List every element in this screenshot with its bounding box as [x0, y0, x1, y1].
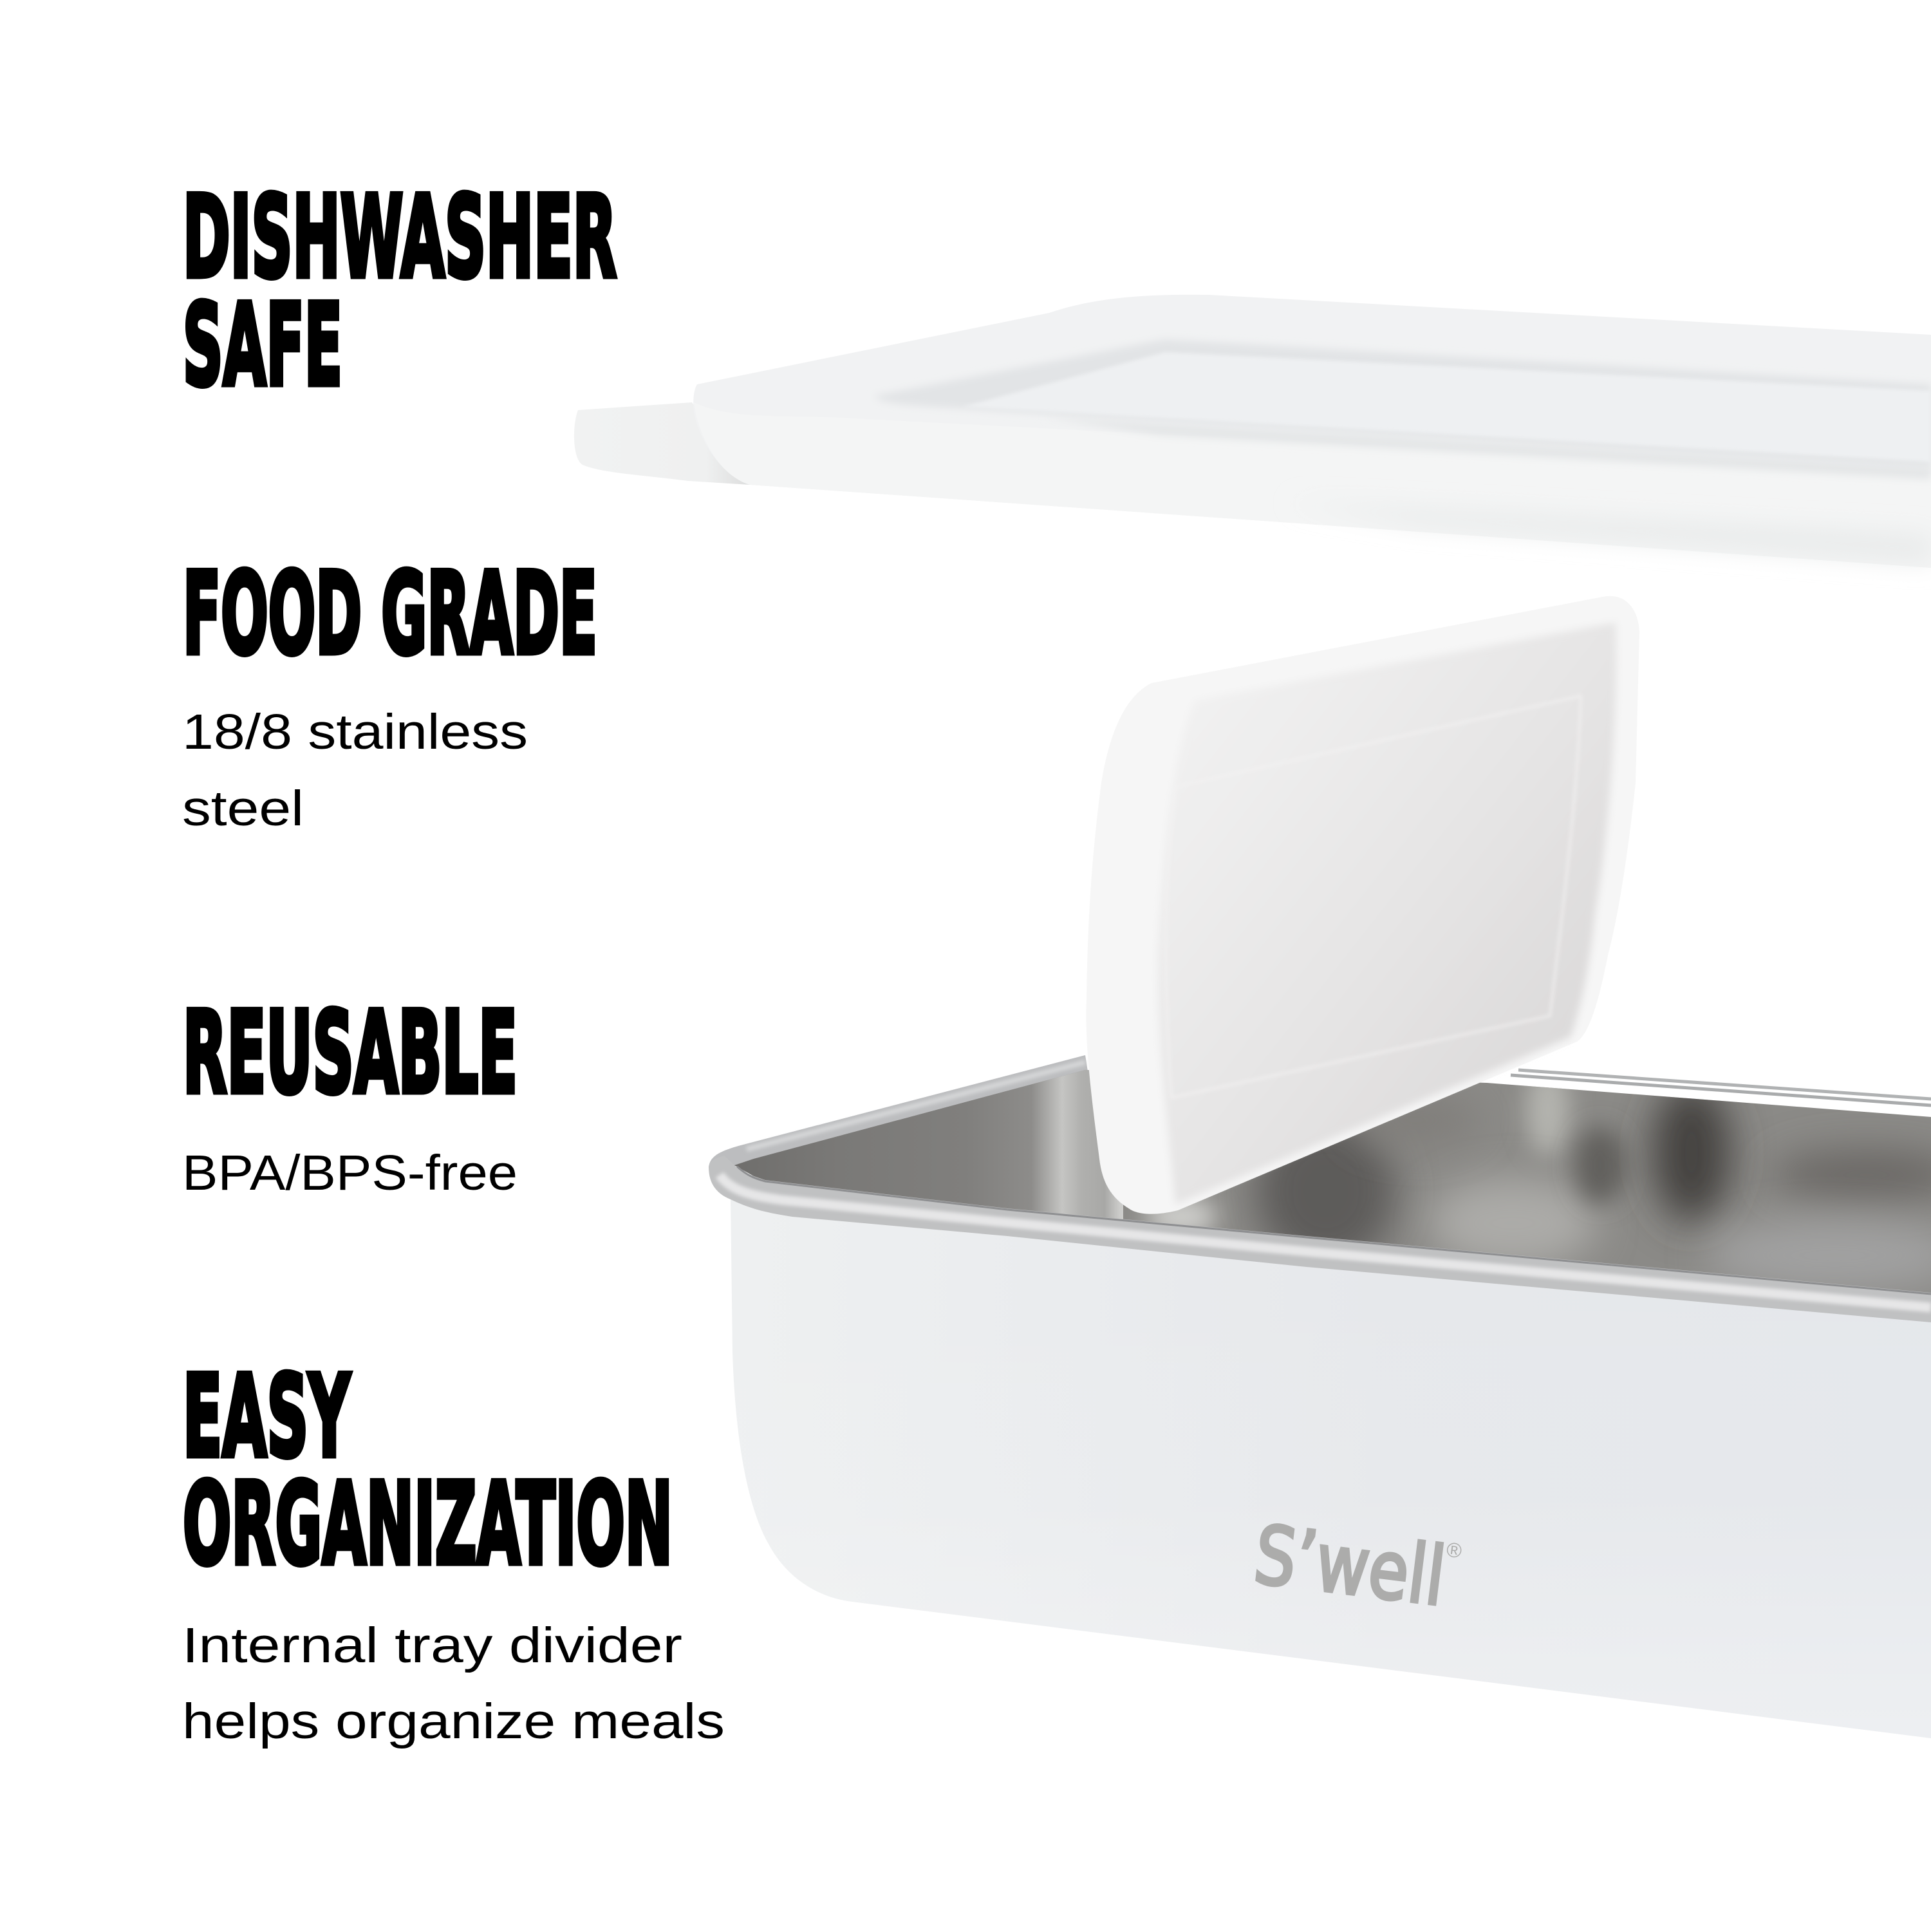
- feature: reusable: [182, 988, 518, 1201]
- feature: food grade: steel: [182, 781, 304, 836]
- left rim: [709, 1055, 1088, 1167]
- brand logo: S’well: [1249, 1508, 1450, 1624]
- far rim upper line: [1518, 1070, 1931, 1099]
- left rim highlight: [747, 1062, 1085, 1149]
- heading: DISHWASHER: [183, 173, 617, 303]
- feature: dishwasher safe: SAFE: [183, 281, 342, 411]
- feature: reusable: BPA/BPS-free: [182, 1145, 518, 1201]
- divider outer edge: [1086, 596, 1639, 1214]
- dark reflection by divider: [1255, 1114, 1397, 1268]
- heading: REUSABLE: [183, 988, 518, 1119]
- feature: food grade: [182, 549, 597, 836]
- light column: [1526, 1065, 1570, 1156]
- lid front shadow band: [1043, 417, 1931, 480]
- tray front: [709, 1156, 1931, 1738]
- feature: easy organization: helps organize meals: [182, 1694, 725, 1749]
- feature: easy organization: Internal tray divider: [182, 1618, 682, 1673]
- lid recess floor: [962, 352, 1931, 462]
- infographic canvas: [184, 189, 1931, 1749]
- lid lower shade: [1287, 502, 1931, 563]
- light lower reflection: [1429, 1178, 1596, 1268]
- front rim: [709, 1156, 1931, 1322]
- divider recess outline: [1166, 696, 1581, 1098]
- feature: food grade: 18/8 stainless: [182, 704, 528, 760]
- lid front face: [694, 402, 1931, 568]
- divider lid: [1086, 596, 1639, 1214]
- far rim lower line: [1511, 1075, 1931, 1105]
- heading: EASY: [183, 1352, 351, 1483]
- top back shade: [1352, 1094, 1480, 1146]
- left wall: [727, 1062, 1123, 1223]
- food tray: [709, 1055, 1931, 1293]
- feature: easy organization: ORGANIZATION: [183, 1459, 673, 1590]
- lower right reflection: [1706, 1220, 1931, 1291]
- feature: easy organization: [182, 1352, 725, 1749]
- feature: dishwasher safe: [183, 173, 617, 411]
- dark reflection 1: [1574, 1127, 1626, 1204]
- infographic canvas: FOOD GRADE: [183, 549, 597, 680]
- brand logo: ®: [1445, 1538, 1463, 1562]
- steel base: [708, 1043, 1931, 1313]
- rim highlight: [720, 1175, 1931, 1308]
- lid body: [693, 295, 1931, 568]
- dark reflection 3: [1770, 1149, 1931, 1201]
- dark reflection 2: [1652, 1082, 1731, 1223]
- lower light patch: [1146, 1197, 1217, 1236]
- rim inner line: [737, 1167, 1931, 1294]
- tray interior: [708, 1043, 1931, 1313]
- lid tab: [574, 402, 750, 485]
- lid recess: [873, 339, 1931, 468]
- divider face: [1157, 623, 1616, 1205]
- body lower highlight: [731, 1197, 1931, 1738]
- main lid: [574, 295, 1931, 568]
- tray body: [731, 1197, 1931, 1738]
